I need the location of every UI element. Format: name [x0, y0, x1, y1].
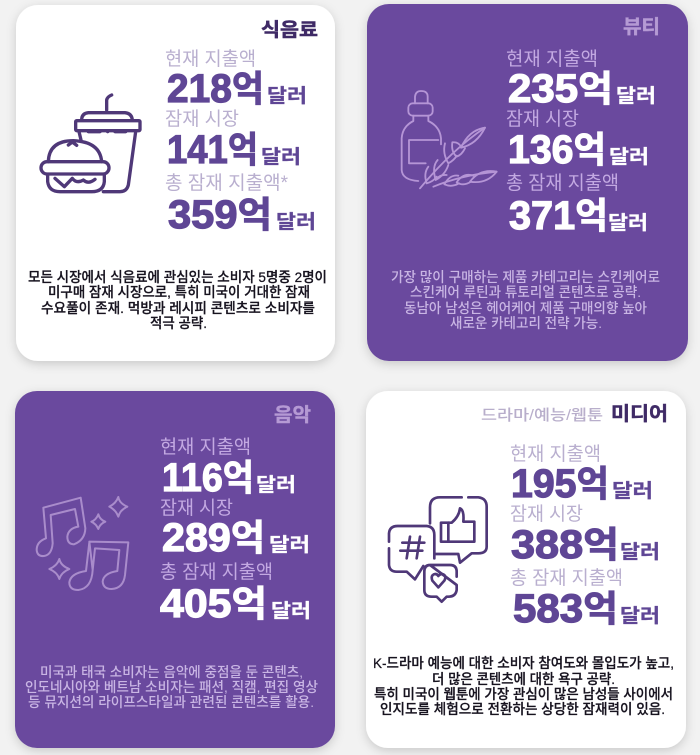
stat: total potential spending: 달러: [271, 600, 311, 622]
stat: current spending: 억: [578, 68, 613, 109]
stat: potential market: 달러: [620, 541, 660, 563]
text block: beauty description: 새로운 카테고리 전략 가능.: [450, 315, 602, 331]
stat: current spending: [506, 48, 656, 111]
stat: current spending: 달러: [267, 85, 307, 107]
text block: media description: [373, 655, 674, 717]
stat: potential market: 잠재 시장: [510, 503, 583, 525]
stat: potential market: 잠재 시장: [506, 108, 579, 130]
text block: food description: 미구매 잠재 시장으로, 특히 미국이 거대한 잠재: [48, 284, 310, 300]
stat: current spending: 현재 지출액: [506, 48, 598, 70]
stat: current spending: 현재 지출액: [510, 443, 601, 465]
card background: beauty: [367, 4, 688, 361]
text block: food description: 수요풀이 존재. 먹방과 레시피 콘텐츠로 소비자를: [41, 300, 315, 316]
stat: potential market: 141: [167, 128, 234, 172]
text block: food description: [28, 269, 327, 331]
stat: current spending: 달러: [616, 85, 656, 107]
stat: current spending: 218: [167, 67, 234, 111]
icon: music notes and sparkles: [37, 497, 128, 590]
stat: current spending: [510, 443, 653, 506]
text block: beauty description: 동남아 남성은 헤어케어 제품 구매의향 높아: [404, 300, 647, 316]
stat: current spending: [160, 436, 296, 500]
stat: potential market: 억: [228, 129, 258, 170]
stat: current spending: 억: [576, 463, 609, 504]
panel: food and beverage: [16, 5, 335, 361]
heading: food: 식음료: [261, 19, 318, 41]
stat: potential market: 388: [511, 523, 578, 567]
stat: total potential spending: [165, 172, 316, 237]
stat: current spending: 달러: [256, 474, 296, 496]
stat: potential market: 잠재 시장: [165, 108, 239, 130]
stat: total potential spending: [160, 561, 311, 626]
stat: total potential spending: 달러: [276, 211, 316, 233]
card background: media: [366, 391, 686, 748]
text block: music description: 미국과 태국 소비자는 음악에 중점을 둔 콘텐츠,: [40, 664, 303, 680]
stat: potential market: [510, 503, 660, 567]
text block: food description: 적극 공략.: [150, 315, 207, 331]
heading: music: 음악: [274, 404, 311, 426]
stat: potential market: 억: [231, 517, 265, 558]
stat: current spending: 235: [508, 67, 575, 111]
stat: current spending: 116: [162, 456, 227, 500]
panel: music: [15, 391, 335, 748]
stat: total potential spending: 371: [509, 194, 576, 238]
stat: current spending: 현재 지출액: [165, 48, 256, 70]
text block: media description: 특히 미국이 웹툰에 가장 관심이 많은 남성들 사이에서: [374, 686, 673, 702]
stat: potential market: 289: [162, 516, 229, 560]
stat: total potential spending: 총 잠재 지출액: [506, 172, 619, 194]
text block: beauty description: 가장 많이 구매하는 제품 카테고리는 스킨케어로: [391, 269, 660, 285]
stat: current spending: 달러: [612, 480, 653, 502]
text block: beauty description: 스킨케어 루틴과 튜토리얼 콘텐츠로 공략.: [410, 284, 641, 300]
stat: potential market: 136: [508, 128, 575, 172]
stat: total potential spending: 583: [513, 587, 580, 631]
stat: total potential spending: 총 잠재 지출액*: [165, 172, 289, 194]
icon: serum bottle and herb: [402, 91, 497, 188]
icon: social chat bubbles: [389, 497, 487, 602]
stat: total potential spending: [510, 567, 660, 631]
stat: total potential spending: 억: [583, 588, 618, 629]
stat: current spending: [165, 48, 307, 111]
stat: total potential spending: 억: [238, 194, 272, 235]
stat: potential market: [160, 497, 310, 560]
stat: total potential spending: 359: [168, 193, 235, 237]
stat: total potential spending: 총 잠재 지출액: [510, 567, 623, 589]
stat: total potential spending: 달러: [620, 605, 660, 627]
text block: media description: 인지도를 체험으로 전환하는 상당한 잠재력이 있음.: [380, 701, 665, 717]
text block: media description: 더 많은 콘텐츠에 대한 욕구 공략.: [432, 671, 615, 687]
stat: total potential spending: 달러: [608, 212, 648, 234]
card background: food: [16, 5, 335, 361]
panel: beauty: [367, 4, 688, 361]
stat: potential market: 달러: [269, 534, 310, 556]
heading: beauty: 뷰티: [623, 16, 660, 38]
card background: music: [15, 391, 335, 748]
stat: potential market: 달러: [261, 146, 301, 168]
text block: food description: 모든 시장에서 식음료에 관심있는 소비자 5명중 2명이: [28, 269, 327, 285]
stat: potential market: 억: [583, 524, 619, 565]
stat: total potential spending: [506, 172, 648, 238]
stat: current spending: 억: [223, 457, 254, 498]
text block: music description: 등 뮤지션의 라이프스타일과 관련된 콘텐츠를 활용.: [28, 694, 314, 710]
stat: total potential spending: 억: [232, 583, 267, 624]
stat: total potential spending: 총 잠재 지출액: [160, 561, 273, 583]
stat: current spending: 억: [232, 68, 264, 109]
text block: music description: [25, 664, 318, 710]
stat: potential market: 억: [573, 129, 606, 170]
stat: current spending: 현재 지출액: [160, 436, 251, 458]
stat: potential market: 잠재 시장: [160, 497, 233, 519]
stat: potential market: 달러: [609, 146, 649, 168]
text block: media description: K-드라마 예능에 대한 소비자 참여도와 몰입도가 높고,: [373, 655, 674, 671]
stat: potential market: [506, 108, 649, 172]
panel: drama, variety, webtoon media: [366, 391, 686, 748]
heading: media subcategories: 드라마/예능/웹툰: [481, 407, 603, 424]
icon: burger and drink: [41, 95, 140, 192]
text block: beauty description: [391, 269, 660, 331]
stat: total potential spending: 405: [160, 582, 227, 626]
stat: current spending: 195: [511, 462, 578, 506]
text block: music description: 인도네시아와 베트남 소비자는 패션, 직캠, 편집 영상: [25, 679, 318, 695]
heading: media: 미디어: [611, 403, 668, 425]
stat: potential market: [165, 108, 301, 172]
stat: total potential spending: 억: [575, 195, 608, 236]
